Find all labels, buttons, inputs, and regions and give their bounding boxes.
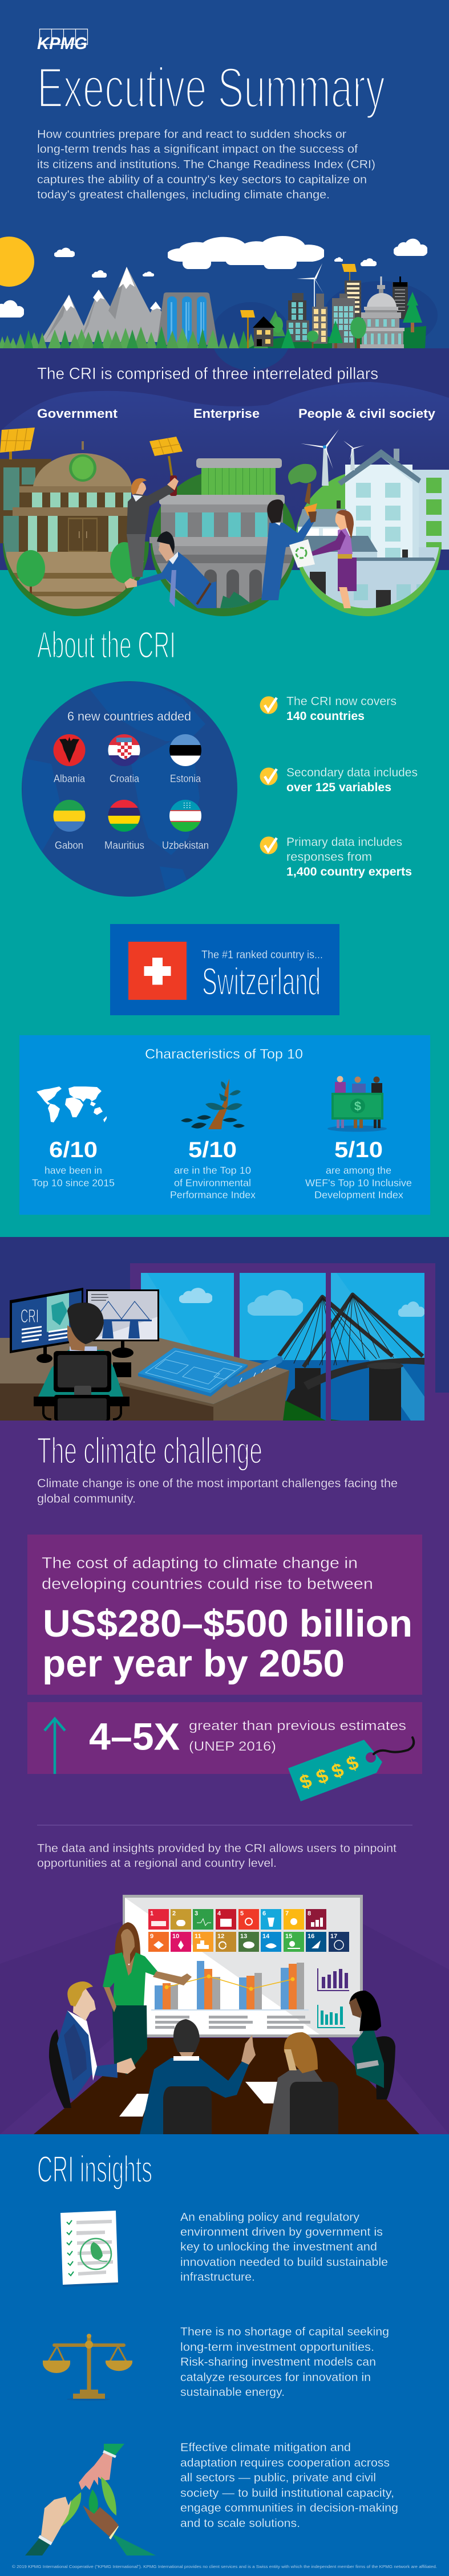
text block: introduction xyxy=(37,128,375,201)
arrow: up xyxy=(45,1719,65,1774)
SDG tiles: 12 xyxy=(217,1933,224,1940)
illustration: analyst at desk with bridge view xyxy=(0,1273,425,1421)
icon: checklist xyxy=(60,2211,118,2287)
wind turbine xyxy=(297,263,323,310)
figure 4-5X: 4–5X xyxy=(89,1716,180,1758)
monitor: CRI: CRI xyxy=(21,1305,39,1326)
trees right of the city xyxy=(350,292,422,348)
text block: insight 3: adaptation requires cooperation across xyxy=(180,2456,390,2469)
icon: price tag: $ xyxy=(297,1770,315,1794)
stat: 6/10: have been in xyxy=(45,1165,102,1176)
country names: Croatia xyxy=(110,772,140,784)
SDG tiles: 6 xyxy=(262,1910,266,1917)
icon: price tag: $ xyxy=(313,1765,331,1789)
text block: insight 3: engage communities in decision-making xyxy=(180,2501,398,2514)
country names: Albania xyxy=(54,772,86,784)
illustration: enterprise bubble xyxy=(149,458,298,617)
stat: 6/10 xyxy=(32,1138,115,1189)
fact: 1,400 experts xyxy=(260,835,412,878)
small trees xyxy=(281,320,343,348)
fact: 125 variables: over 125 variables xyxy=(286,780,391,794)
SDG tiles: 7 xyxy=(285,1910,289,1917)
heading: About the CRI: About the CRI xyxy=(37,624,176,666)
panel: Characteristics of Top 10 xyxy=(19,1035,430,1215)
illustration: people and civil society bubble xyxy=(286,429,449,618)
text block: insight 1: An enabling policy and regulatory xyxy=(180,2211,360,2224)
SDG tiles: 3 xyxy=(195,1910,198,1917)
presentation screen xyxy=(123,1895,363,2037)
SDG tiles: 5 xyxy=(240,1910,244,1917)
text block: insight 2: catalyze resources for innovation in xyxy=(180,2371,371,2384)
icon: price tag: $ xyxy=(343,1752,362,1776)
panel: climate background xyxy=(0,1263,449,2134)
window mullions xyxy=(326,1273,331,1421)
panel: pillars background xyxy=(0,348,449,576)
stat: 5/10 inclusive: are among the xyxy=(326,1165,391,1176)
flag: Croatia xyxy=(108,734,140,766)
country names: Uzbekistan xyxy=(162,839,209,851)
panel: about background xyxy=(0,564,449,1237)
fact: 1,400 experts: responses from xyxy=(286,850,372,864)
SDG tiles: 13 xyxy=(240,1933,247,1940)
SDG tiles: 14 xyxy=(262,1933,270,1940)
SDG tiles xyxy=(148,1909,349,1952)
heading: 6 new countries added xyxy=(67,709,191,723)
label: People and civil society: People & civil society xyxy=(298,406,435,421)
big figure: US$280–$500 billion xyxy=(43,1602,412,1645)
SDG tiles: 8 xyxy=(308,1910,311,1917)
footer: copyright: © 2019 KPMG International Cooperative ("KPMG International"). KPMG International provides no client services and is a Swiss entity with which the independent member firms of the KPMG network are affiliated. xyxy=(12,2564,437,2569)
stat: 5/10 environmental: 5/10 xyxy=(188,1138,237,1162)
gray tower xyxy=(332,294,355,348)
icon: scales xyxy=(43,2334,132,2401)
mini chart purple xyxy=(317,1968,349,1991)
figure: man holding solar panel xyxy=(127,437,183,577)
text block: climate introduction xyxy=(37,1477,398,1505)
mini chart teal xyxy=(317,2005,345,2028)
stat: 5/10 environmental: of Environmental xyxy=(174,1177,251,1189)
man on left xyxy=(49,1981,136,2108)
striped tower with solar panel xyxy=(342,264,361,318)
text block: insight 2 xyxy=(180,2325,389,2399)
text: The #1 ranked country is... xyxy=(201,949,323,961)
text block: insight 2: Risk-sharing investment models can xyxy=(180,2355,376,2369)
panel: cost of adapting: The cost of adapting to climate change in xyxy=(42,1554,358,1572)
background pines xyxy=(254,311,285,348)
text block: introduction: How countries prepare for and react to sudden shocks or xyxy=(37,128,346,141)
man pointing xyxy=(140,2019,256,2134)
fact: 125 variables: Secondary data includes xyxy=(286,766,418,779)
icon: Swiss flag xyxy=(128,942,187,1000)
stat: 5/10 inclusive xyxy=(305,1138,412,1200)
cream tower xyxy=(312,294,327,344)
black tower xyxy=(393,276,408,319)
icon: people with banknote: $ xyxy=(354,1099,361,1113)
figure: woman holding plant xyxy=(261,464,317,600)
text block: data and insights: The data and insights provided by the CRI allows users to pinpoint xyxy=(37,1842,397,1855)
text block: insight 3 xyxy=(180,2441,398,2530)
panel: globe with new countries xyxy=(22,681,237,897)
illustration: boardroom presentation xyxy=(0,1895,449,2134)
panel: Switzerland xyxy=(110,924,339,1015)
fact: 1,400 experts: Primary data includes xyxy=(286,835,402,849)
fact: 140 countries: The CRI now covers xyxy=(286,694,397,708)
heading: three pillars band wave xyxy=(0,382,449,570)
hills behind city xyxy=(211,281,438,371)
window panes xyxy=(141,1273,424,1421)
label: Enterprise: Enterprise xyxy=(193,406,260,421)
SDG tiles: 17 xyxy=(330,1933,337,1940)
text block: insight 1 xyxy=(180,2211,388,2284)
icon: world map xyxy=(37,1086,107,1122)
country names: Estonia xyxy=(170,772,201,784)
presenter xyxy=(103,1922,192,2075)
house xyxy=(253,316,275,347)
icon: price tag: $ xyxy=(329,1759,347,1783)
text block: insight 1: infrastructure. xyxy=(180,2270,255,2284)
country names: Mauritius xyxy=(104,839,144,851)
text block: data and insights: opportunities at a regional and country level. xyxy=(37,1857,277,1870)
stat: 5/10 inclusive: 5/10 xyxy=(334,1138,383,1162)
SDG tiles: 2 xyxy=(172,1910,176,1917)
text block: introduction: long-term trends has a significant impact on the success of xyxy=(37,143,358,156)
panel: climate illustration background xyxy=(0,1237,449,1425)
text block: introduction: today's greatest challenges, including climate change. xyxy=(37,189,330,201)
text block: insight 3: society — to build institutional capacity, xyxy=(180,2487,394,2500)
flag: Mauritius xyxy=(108,800,140,832)
table xyxy=(34,2038,419,2134)
icon: plant xyxy=(181,1079,245,1129)
window clouds xyxy=(179,1288,425,1317)
wind turbines xyxy=(301,429,365,486)
text block: introduction: captures the ability of a country's key sectors to capitalize on xyxy=(37,173,367,186)
flag: Gabon xyxy=(53,800,86,832)
bar chart xyxy=(151,1961,309,2011)
stat: 5/10 environmental: are in the Top 10 xyxy=(174,1165,251,1176)
fact: 140 countries: 140 countries xyxy=(286,709,365,723)
panel: cost of adapting xyxy=(27,1535,422,1695)
stat: 5/10 environmental: Performance Index xyxy=(170,1189,256,1200)
heading: pillars: The CRI is comprised of three interrelated pillars xyxy=(37,365,378,383)
monitor: CRI xyxy=(10,1288,83,1363)
panel: greater than estimates: (UNEP 2016) xyxy=(189,1739,276,1753)
label: Government: Government xyxy=(37,406,118,421)
panel: header background xyxy=(0,0,449,349)
SDG tiles: 16 xyxy=(308,1933,314,1940)
illustration: landscape and city xyxy=(0,236,438,371)
monitor: bridge blueprint xyxy=(86,1289,159,1358)
text block: insight 2: sustainable energy. xyxy=(180,2386,285,2399)
flag: Albania xyxy=(54,734,86,766)
text block: introduction: its citizens and institutions. The Change Readiness Index (CRI) xyxy=(37,158,375,171)
figure: crouching man xyxy=(124,531,216,608)
capitol building xyxy=(359,276,404,348)
text block: insight 3: all sectors — public, private and civil xyxy=(180,2471,376,2484)
blueprint xyxy=(138,1348,279,1397)
text block: insight 1: key to unlocking the investment and xyxy=(180,2240,377,2253)
fact: 125 variables xyxy=(260,766,418,794)
desk xyxy=(0,1338,289,1421)
SDG tiles: 10 xyxy=(172,1933,179,1940)
panel: cost of adapting: developing countries could rise to between xyxy=(42,1574,373,1593)
text block: insight 3: Effective climate mitigation and xyxy=(180,2441,351,2454)
stat: 5/10 inclusive: Development Index xyxy=(314,1189,403,1200)
stat: 6/10: Top 10 since 2015 xyxy=(32,1177,115,1189)
solar panel small xyxy=(240,310,255,348)
heading: CRI insights: CRI insights xyxy=(37,2148,152,2190)
placeholder text lines xyxy=(155,2016,310,2029)
SDG tiles: 9 xyxy=(150,1933,153,1940)
icon: hands with leaves xyxy=(25,2444,156,2555)
continents xyxy=(23,681,205,889)
ground xyxy=(248,326,426,348)
bridge xyxy=(279,1295,424,1421)
icon: people with banknote xyxy=(327,1076,387,1132)
stat: 5/10 environmental xyxy=(170,1138,256,1200)
text block: data and insights xyxy=(37,1842,397,1870)
woman on right xyxy=(349,1991,395,2099)
SDG tiles: 4 xyxy=(217,1910,221,1917)
heading: The climate challenge: The climate challenge xyxy=(37,1430,262,1471)
text block: insight 2: There is no shortage of capital seeking xyxy=(180,2325,389,2338)
stat: 6/10: 6/10 xyxy=(49,1138,98,1162)
fact: 1,400 experts: 1,400 country experts xyxy=(286,865,412,878)
panel: insights background xyxy=(0,2134,449,2576)
SDG tiles: 15 xyxy=(285,1933,292,1940)
stat: 5/10 inclusive: WEF's Top 10 Inclusive xyxy=(305,1177,412,1189)
panel: cost of adapting: per year by 2050 xyxy=(42,1642,345,1685)
SDG tiles: 1 xyxy=(150,1910,153,1917)
caption: greater than previous estimates xyxy=(189,1718,406,1733)
text block: climate introduction: global community. xyxy=(37,1492,136,1505)
fact: 140 countries xyxy=(260,694,397,723)
papers xyxy=(119,2082,280,2117)
flag: Estonia xyxy=(169,734,201,766)
woman front right xyxy=(268,2032,338,2134)
icon: sun xyxy=(0,237,34,287)
text block: insight 1: environment driven by government is xyxy=(180,2225,383,2239)
dark tower xyxy=(286,293,309,342)
text block: insight 2: long-term investment opportunities. xyxy=(180,2341,374,2354)
text block: insight 1: innovation needed to build sustainable xyxy=(180,2256,388,2269)
illustration: government bubble xyxy=(0,428,149,616)
icon: price tag xyxy=(288,1737,414,1801)
clouds xyxy=(0,236,428,318)
dam xyxy=(157,292,218,345)
heading: Characteristics of Top 10 xyxy=(145,1047,303,1062)
pine tree row xyxy=(0,326,256,348)
text block: insight 3: and to scale solutions. xyxy=(180,2517,300,2530)
solar panel large xyxy=(0,428,35,459)
text block: climate introduction: Climate change is one of the most important challenges facing the xyxy=(37,1477,398,1490)
panel: greater than estimates xyxy=(27,1702,422,1774)
mountains xyxy=(40,267,165,342)
country name: Switzerland xyxy=(202,960,321,1003)
country names: Gabon xyxy=(55,839,83,851)
person at desk xyxy=(34,1303,131,1421)
flag: Uzbekistan xyxy=(169,800,201,832)
KPMG logo: KPMG xyxy=(37,34,87,53)
SDG tiles: 11 xyxy=(195,1933,201,1940)
figure: woman holding recycling sheet xyxy=(289,510,357,608)
country names xyxy=(54,772,209,851)
